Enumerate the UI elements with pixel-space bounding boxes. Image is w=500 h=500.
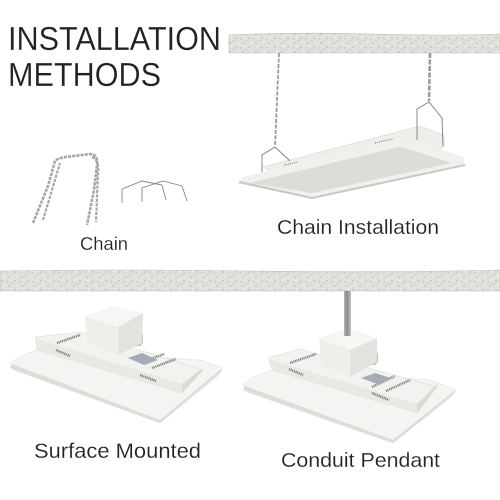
fixture panel: [238, 138, 465, 199]
conduit pole: [344, 291, 351, 336]
label: chain installation: Chain Installation: [277, 217, 439, 239]
panel: [243, 370, 456, 443]
conduit pendant fixture: [243, 291, 456, 443]
vents: [289, 354, 410, 400]
surface mounted fixture: [10, 306, 223, 423]
suspension chains: [275, 53, 430, 146]
panel: [10, 350, 223, 423]
bracket: [136, 333, 143, 346]
bracket: [371, 352, 378, 365]
title: INSTALLATION: [8, 20, 221, 57]
ceiling: lower: [0, 270, 500, 291]
chain accessory: [33, 154, 98, 225]
label plate: [361, 373, 391, 384]
fixture housing: [263, 126, 444, 178]
label plate: [128, 353, 158, 365]
hanger wires: [262, 102, 443, 172]
junction box: [319, 328, 377, 377]
label: conduit pendant: Conduit Pendant: [281, 450, 440, 472]
driver housing: [35, 332, 203, 393]
label: chain: Chain: [80, 234, 128, 254]
junction box: [85, 306, 143, 355]
ceiling: chain installation: [229, 33, 500, 53]
vents: [56, 335, 176, 381]
title: [8, 20, 221, 93]
title: METHODS: [8, 56, 161, 93]
driver housing: [268, 349, 437, 413]
chain installation fixture: [238, 53, 465, 199]
label: surface mounted: Surface Mounted: [34, 440, 201, 463]
wire hangers accessory: [122, 181, 187, 203]
